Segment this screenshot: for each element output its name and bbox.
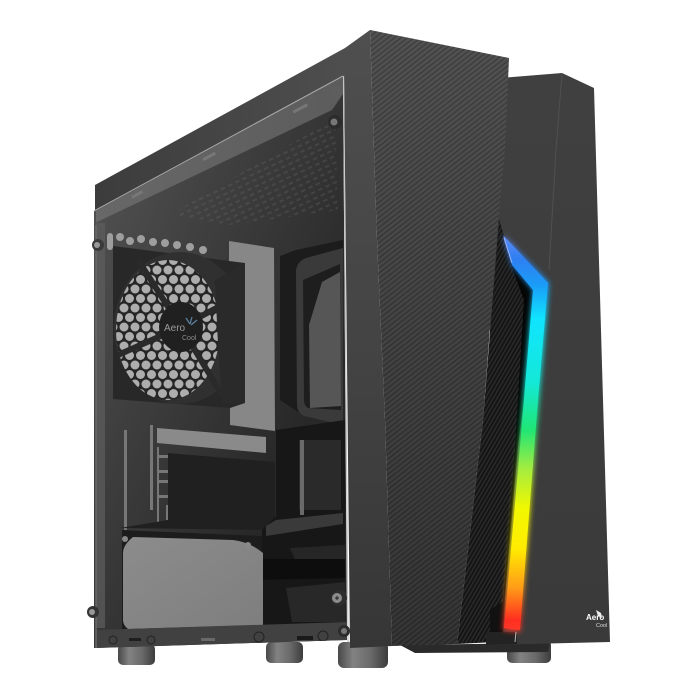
fan hub logo: Aero xyxy=(164,323,186,334)
right front panel xyxy=(490,73,610,645)
logo: Aerocool xyxy=(586,610,607,629)
expansion card plate xyxy=(157,428,266,453)
bottom frame xyxy=(94,622,347,650)
fan hub logo: Cool xyxy=(182,335,197,342)
glass side panel xyxy=(94,76,348,650)
fan xyxy=(113,246,246,408)
PSU opening xyxy=(122,530,263,636)
logo: Aerocool: Cool xyxy=(596,623,607,629)
side pillar xyxy=(344,30,392,648)
dark recessed panel xyxy=(457,219,534,645)
feet xyxy=(118,640,551,668)
left frame xyxy=(96,223,105,628)
rear vent xyxy=(280,240,343,425)
carbon front panel xyxy=(370,30,509,646)
card slots xyxy=(124,425,168,530)
drive cage xyxy=(262,420,345,624)
gray bracket xyxy=(229,241,275,431)
holes above fan xyxy=(107,233,207,254)
PC case xyxy=(87,30,610,668)
top side strip xyxy=(95,48,345,212)
thumb screws xyxy=(87,86,350,637)
dark center area xyxy=(120,453,275,530)
RGB LED strip xyxy=(503,235,549,642)
top frame band xyxy=(94,76,343,223)
logo: Aerocool: Aero xyxy=(586,613,604,622)
perforated top vents xyxy=(180,126,338,225)
fan hub logo xyxy=(159,302,203,352)
